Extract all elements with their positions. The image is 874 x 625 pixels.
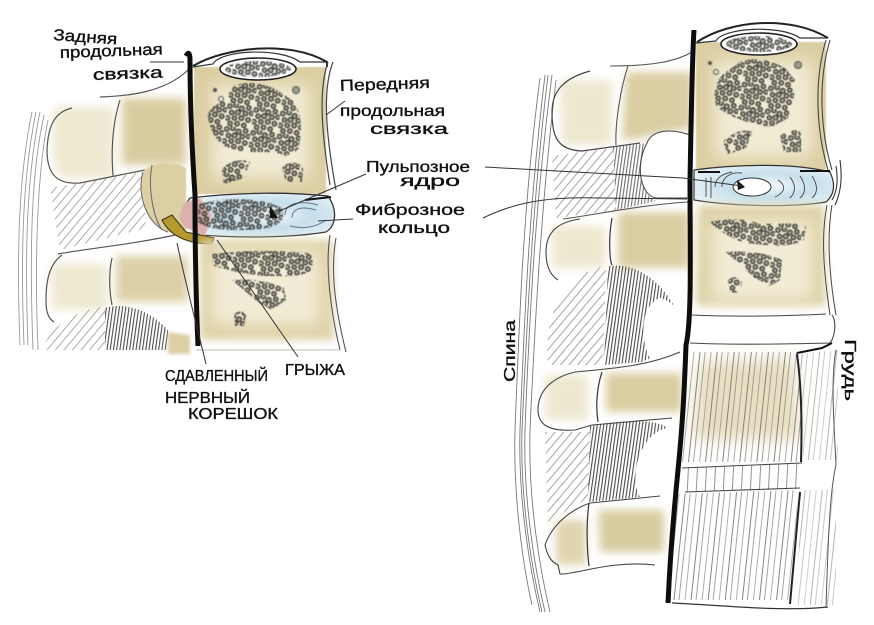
- label: compressed nerve root: НЕРВНЫЙ: [165, 388, 250, 407]
- right process 2: [546, 202, 690, 280]
- label: posterior ligament: продольная: [60, 41, 163, 62]
- right dark ligament 2: [604, 266, 686, 365]
- label: annulus fibrosus: кольцо: [378, 220, 450, 237]
- label: chest: Грудь: [841, 339, 858, 401]
- right foramen 1: [640, 131, 690, 198]
- left hatch between processes: [50, 172, 146, 250]
- label: posterior ligament: Задняя: [53, 27, 118, 48]
- right hatch 2: [547, 266, 606, 365]
- right leader lines: [483, 167, 742, 218]
- label: compressed nerve root: КОРЕШОК: [188, 406, 279, 423]
- label: back: Спина: [502, 320, 519, 382]
- right second vertebral body: [692, 205, 836, 316]
- label: compressed nerve root: СДАВЛЕННЫЙ: [165, 366, 268, 385]
- right dark ligament 1: [613, 143, 656, 210]
- left lower hatch and root: [42, 306, 190, 354]
- right dark ligament 3: [588, 421, 668, 502]
- spine ligament: [668, 30, 694, 603]
- label: nucleus pulposus: Пульпозное: [366, 159, 470, 176]
- right process 3: [538, 352, 682, 430]
- label: compressed nerve root: [165, 366, 279, 423]
- label: anterior ligament: Передняя: [340, 75, 430, 95]
- left lower process: [46, 234, 188, 322]
- label: hernia: ГРЫЖА: [285, 362, 345, 379]
- right foramen 3: [636, 430, 680, 498]
- label: annulus fibrosus: Фиброзное: [355, 202, 465, 219]
- upper vertebral body: [193, 48, 336, 194]
- right back muscle lines: [515, 75, 556, 612]
- white disc band: [690, 315, 835, 344]
- label: posterior ligament: связка: [93, 65, 163, 84]
- label: anterior ligament: продольная: [340, 103, 445, 120]
- label: nucleus pulposus: [366, 159, 470, 190]
- right bottom body lines: [668, 350, 836, 609]
- left foramen: [141, 163, 186, 232]
- right hatch 3: [545, 432, 590, 522]
- right figure: healthy spine: [483, 23, 858, 612]
- lower vertebral body: [196, 235, 346, 352]
- label: posterior ligament: [53, 27, 163, 84]
- label: annulus fibrosus: [355, 202, 465, 237]
- left back muscle lines: [18, 112, 48, 350]
- right process 4: [545, 496, 664, 574]
- lower disc: [680, 463, 802, 492]
- left upper process: [47, 70, 188, 183]
- label: anterior ligament: [340, 75, 448, 138]
- herniated disc: [180, 193, 335, 237]
- leader lines: [150, 62, 366, 364]
- label: anterior ligament: связка: [370, 121, 448, 138]
- right healthy disc: [694, 160, 841, 206]
- right third body lines: [682, 343, 838, 462]
- right process 1: [552, 52, 692, 151]
- right hatch 1: [552, 148, 616, 218]
- label: nucleus pulposus: ядро: [400, 173, 460, 190]
- right foramen 2: [643, 298, 690, 359]
- posterior longitudinal ligament: [186, 53, 198, 346]
- right top vertebral body: [696, 23, 832, 170]
- compressed nerve root: [162, 215, 214, 244]
- left figure: herniated disc: [18, 27, 470, 423]
